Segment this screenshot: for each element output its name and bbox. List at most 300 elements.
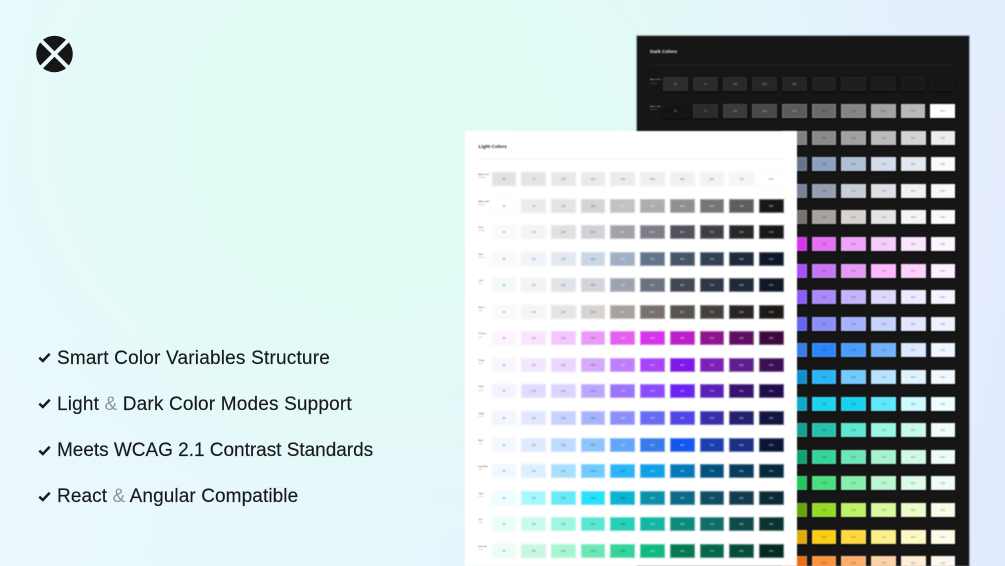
dark row: fuchsia: 600	[851, 242, 856, 246]
light row: warm: 700	[710, 310, 714, 314]
light row: violet: 200	[561, 389, 566, 393]
light row: purple: 400	[620, 363, 625, 367]
dark row: slate: 800	[911, 162, 916, 166]
dark row: green	[792, 475, 956, 491]
light row: violet: 100	[531, 389, 536, 393]
dark row: gray: 700	[881, 136, 886, 140]
light row: alpha dark: 50	[502, 177, 506, 181]
light row: indigo: 400	[620, 416, 625, 420]
light row: alpha light: 100	[561, 204, 566, 208]
light row: cyan	[478, 490, 785, 506]
dark row: sky: 400	[792, 375, 797, 379]
dark row: violet: 800	[911, 295, 916, 299]
dark row: purple: 800	[911, 268, 916, 272]
light row: alpha light: 75	[532, 204, 535, 208]
dark row: indigo: 800	[911, 322, 916, 326]
dark row: sky: 800	[911, 375, 916, 379]
dark row: lime: 700	[881, 508, 886, 512]
dark row: purple	[792, 263, 956, 279]
light row: alpha dark: 600	[710, 177, 714, 181]
light row: indigo: 700	[710, 416, 714, 420]
light row: blue: 500	[650, 442, 655, 446]
dark row: orange: 600	[851, 561, 856, 565]
light row: indigo: 800	[739, 416, 744, 420]
panel: light colors: Indigo	[478, 413, 484, 415]
light row: slate: 400	[620, 257, 625, 261]
light row: teal: 200	[561, 522, 566, 526]
dark row: blue: 700	[881, 348, 886, 352]
light row: gray: 300	[591, 230, 595, 234]
dark row: teal: 900	[941, 428, 945, 432]
panel: light colors: Variable	[478, 204, 485, 206]
dark row: slate: 700	[881, 162, 886, 166]
panel: light colors: Teal	[478, 519, 482, 521]
feature: react and angular: React & Angular Compatible	[57, 486, 298, 506]
light row: purple: 900	[769, 363, 774, 367]
dark row: purple: 400	[792, 268, 797, 272]
light row: blue: 100	[531, 442, 536, 446]
dark row: gray: 600	[851, 136, 856, 140]
panel: light colors: Color	[478, 336, 483, 338]
light row: cyan: 300	[591, 496, 595, 500]
light row: indigo: 50	[502, 416, 506, 420]
light row: alpha light	[478, 198, 785, 214]
dark row: emerald: 800	[911, 455, 916, 459]
light row: alpha light: 400	[650, 204, 655, 208]
feature: light and dark modes: Light & Dark Color Modes Support	[57, 394, 352, 414]
light row: gray: 100	[531, 230, 536, 234]
dark row: indigo: 900	[941, 322, 945, 326]
dark row: cool: 400	[792, 189, 797, 193]
panel: dark colors: Alpha Dark	[650, 79, 661, 81]
dark row: alpha dark	[650, 76, 945, 91]
dark row: violet: 500	[822, 295, 826, 299]
panel: light colors: Gray	[478, 283, 482, 285]
light row: violet: 700	[710, 389, 714, 393]
light row: warm: 200	[561, 310, 566, 314]
panel: dark colors	[637, 36, 969, 566]
panel: light colors: Light Blue	[478, 466, 488, 468]
light row: alpha dark: 500	[680, 177, 684, 181]
dark row: slate: 400	[792, 162, 797, 166]
light row: sky: 800	[739, 469, 744, 473]
dark row: yellow: 900	[941, 534, 945, 538]
panel: light colors: Neutral	[478, 230, 484, 232]
dark row: alpha light: 500	[851, 109, 856, 113]
panel: light colors: Variable	[478, 177, 485, 179]
dark row: cool	[792, 183, 956, 199]
light row: emerald: 50	[502, 549, 506, 553]
dark row: alpha dark: 400	[822, 82, 826, 86]
dark row: yellow: 400	[792, 534, 797, 538]
light row: gray: 900	[769, 230, 774, 234]
dark row: warm	[792, 209, 956, 225]
light row: cool: 600	[680, 283, 684, 287]
dark row: alpha light: 600	[881, 109, 886, 113]
light row: purple: 100	[531, 363, 536, 367]
panel: light colors: Violet	[478, 386, 484, 388]
light row: warm: 800	[739, 310, 744, 314]
dark row: fuchsia: 400	[792, 242, 797, 246]
dark row: purple: 700	[881, 268, 886, 272]
dark row: sky: 600	[851, 375, 856, 379]
dark row: emerald: 900	[941, 455, 945, 459]
dark row: indigo: 400	[792, 322, 797, 326]
dark row: alpha dark: 75	[704, 82, 707, 86]
light row: cyan: 800	[739, 496, 744, 500]
dark row: cool: 600	[851, 189, 856, 193]
dark row: lime: 400	[792, 508, 797, 512]
panel: light colors: Slate	[478, 254, 483, 256]
dark row: lime: 900	[941, 508, 945, 512]
light row: slate	[478, 251, 785, 267]
light row: fuchsia: 600	[680, 336, 684, 340]
light row: teal: 700	[710, 522, 714, 526]
light row: blue: 50	[502, 442, 506, 446]
light row: alpha light: 50	[502, 204, 506, 208]
panel: light colors: Alpha Dark	[478, 174, 489, 176]
dark row: cool: 900	[941, 189, 945, 193]
dark row: yellow: 800	[911, 534, 916, 538]
light row: emerald: 100	[531, 549, 536, 553]
light row: cyan: 500	[650, 496, 655, 500]
light row: purple: 600	[680, 363, 684, 367]
light row: violet: 900	[769, 389, 774, 393]
dark row: teal: 700	[881, 428, 886, 432]
panel: light colors: Emerald	[478, 546, 487, 548]
light row: blue: 400	[620, 442, 625, 446]
panel: light colors: Color	[478, 549, 483, 551]
panel: light colors: Cyan	[478, 493, 484, 495]
dark row: cyan: 400	[792, 402, 797, 406]
light row: cyan: 200	[561, 496, 566, 500]
dark row: gray: 900	[941, 136, 945, 140]
light row: sky: 300	[591, 469, 595, 473]
dark row: cool: 500	[822, 189, 826, 193]
light row: cyan: 400	[620, 496, 625, 500]
light row: blue: 900	[769, 442, 774, 446]
dark row: emerald: 700	[881, 455, 886, 459]
light row: slate: 50	[502, 257, 506, 261]
light row: violet: 50	[502, 389, 506, 393]
dark row: gray: 400	[792, 136, 797, 140]
light row: cyan: 100	[531, 496, 536, 500]
light row: teal: 300	[591, 522, 595, 526]
light row: blue	[478, 437, 785, 453]
light row: alpha light: 200	[591, 204, 595, 208]
light row: gray: 50	[502, 230, 506, 234]
light row: gray	[478, 224, 785, 240]
light row: alpha light: 800	[769, 204, 774, 208]
light row: cyan: 600	[680, 496, 684, 500]
light row: fuchsia: 200	[561, 336, 566, 340]
dark row: teal	[792, 422, 956, 438]
light row: warm: 300	[591, 310, 595, 314]
light row: sky: 900	[769, 469, 774, 473]
light row: sky	[478, 463, 785, 479]
logo	[36, 36, 73, 72]
light row: alpha light: 700	[739, 204, 744, 208]
dark row: orange: 500	[822, 561, 826, 565]
dark row: sky: 500	[822, 375, 826, 379]
light row: gray: 400	[620, 230, 625, 234]
dark row: alpha dark: 800	[940, 82, 945, 86]
light row: indigo: 500	[650, 416, 655, 420]
icon: check 2	[38, 398, 50, 409]
dark row: slate: 500	[822, 162, 826, 166]
dark panel title: Dark Colors	[650, 50, 677, 55]
light row: cool: 700	[710, 283, 714, 287]
light row: cool: 50	[502, 283, 506, 287]
dark row: cool: 700	[881, 189, 886, 193]
light row: cool: 500	[650, 283, 655, 287]
panel: light colors: Color	[478, 469, 483, 471]
light row: alpha light: 500	[680, 204, 684, 208]
dark row: teal: 500	[822, 428, 826, 432]
dark row: teal: 800	[911, 428, 916, 432]
dark row: cyan: 900	[941, 402, 945, 406]
dark row: fuchsia: 900	[941, 242, 945, 246]
dark row: warm: 800	[911, 215, 916, 219]
light row: teal: 500	[650, 522, 655, 526]
dark row: purple: 900	[941, 268, 945, 272]
light row: fuchsia: 50	[502, 336, 506, 340]
panel: light colors: Color	[478, 522, 483, 524]
dark row: indigo: 700	[881, 322, 886, 326]
panel: light colors	[465, 131, 797, 566]
light row: alpha dark: 700	[739, 177, 744, 181]
panel: light colors: Gray	[478, 310, 482, 312]
light row: fuchsia: 300	[591, 336, 595, 340]
light row: violet: 300	[591, 389, 595, 393]
light row: sky: 600	[680, 469, 684, 473]
light row: alpha dark: 800	[769, 177, 774, 181]
light row: cyan: 700	[710, 496, 714, 500]
light row: slate: 700	[710, 257, 714, 261]
dark row: warm: 400	[792, 215, 797, 219]
dark row: alpha dark: 50	[674, 82, 677, 86]
dark row: alpha dark: 300	[792, 82, 797, 86]
dark row: blue: 900	[941, 348, 945, 352]
dark row: sky: 700	[881, 375, 886, 379]
dark row: lime: 800	[911, 508, 916, 512]
light row: teal: 900	[769, 522, 774, 526]
dark row: cyan: 800	[911, 402, 916, 406]
dark row: green: 800	[911, 481, 916, 485]
icon: check 4	[38, 492, 50, 502]
feature: smart color variables: Smart Color Variables Structure	[57, 348, 330, 368]
dark row: orange	[782, 555, 956, 566]
dark row: blue: 800	[911, 348, 916, 352]
dark row: cyan: 700	[881, 402, 886, 406]
light row: gray: 500	[650, 230, 655, 234]
dark row: alpha light: 800	[940, 109, 945, 113]
light row: emerald: 600	[680, 549, 684, 553]
light row: purple: 700	[710, 363, 714, 367]
light row: slate: 500	[650, 257, 655, 261]
dark row: purple: 600	[851, 268, 856, 272]
dark row: violet: 400	[792, 295, 797, 299]
dark row: sky	[792, 369, 956, 385]
light row: emerald: 700	[710, 549, 714, 553]
dark row: teal: 600	[851, 428, 856, 432]
light row: cool: 400	[620, 283, 625, 287]
icon: check 3	[38, 446, 50, 456]
dark row: cyan: 500	[822, 402, 826, 406]
panel: light colors: Purple	[478, 360, 485, 362]
panel: light colors: Gray	[478, 227, 483, 229]
light row: sky: 100	[531, 469, 536, 473]
dark row: violet: 600	[851, 295, 856, 299]
light row: alpha dark: 100	[561, 177, 566, 181]
light row: emerald: 400	[620, 549, 625, 553]
light row: fuchsia: 800	[739, 336, 744, 340]
dark row: alpha light: 300	[792, 109, 797, 113]
light row: blue: 800	[739, 442, 744, 446]
light row: teal: 400	[620, 522, 625, 526]
light row: alpha dark: 400	[650, 177, 655, 181]
light row: gray: 600	[680, 230, 684, 234]
dark row: warm: 500	[822, 215, 826, 219]
dark row: lime: 600	[851, 508, 856, 512]
light row: blue: 600	[680, 442, 684, 446]
dark row: fuchsia: 800	[911, 242, 916, 246]
light row: fuchsia: 900	[769, 336, 774, 340]
dark row: gray: 500	[822, 136, 826, 140]
light row: indigo: 300	[591, 416, 595, 420]
dark row: yellow	[792, 529, 956, 545]
light row: indigo	[478, 410, 785, 426]
panel: light colors: Color	[478, 496, 483, 498]
dark row: slate: 900	[941, 162, 945, 166]
dark row: yellow: 600	[851, 534, 856, 538]
dark row: alpha dark: 100	[733, 82, 737, 86]
dark row: alpha light: 75	[704, 109, 707, 113]
light row: teal	[478, 516, 785, 532]
dark row: alpha light: 700	[911, 109, 915, 113]
feature: WCAG contrast: Meets WCAG 2.1 Contrast Standards	[57, 440, 373, 460]
light row: purple	[478, 357, 785, 373]
light row: warm	[478, 304, 785, 320]
light row: alpha dark: 200	[591, 177, 595, 181]
panel: light colors: Color	[478, 363, 483, 365]
dark row: violet: 700	[881, 295, 886, 299]
dark row: lime: 500	[822, 508, 826, 512]
panel: light colors: Blue	[478, 440, 483, 442]
light row: teal: 600	[680, 522, 684, 526]
dark row: blue: 600	[851, 348, 856, 352]
dark row: alpha dark: 500	[851, 82, 856, 86]
light row: gray: 200	[561, 230, 566, 234]
dark row: cool: 800	[911, 189, 916, 193]
light row: blue: 300	[591, 442, 595, 446]
light row: gray: 700	[710, 230, 714, 234]
dark row: orange: 800	[911, 561, 916, 565]
light row: slate: 900	[769, 257, 774, 261]
dark row: alpha light	[650, 103, 956, 119]
light row: cool: 100	[531, 283, 536, 287]
dark row: indigo: 500	[822, 322, 826, 326]
panel: dark colors: Alpha Light	[650, 106, 661, 108]
dark row: alpha light: 100	[733, 109, 737, 113]
light row: violet: 600	[680, 389, 684, 393]
light row: sky: 400	[620, 469, 625, 473]
dark row: slate: 600	[851, 162, 856, 166]
light row: emerald: 500	[650, 549, 655, 553]
light row: violet	[478, 383, 785, 399]
dark row: alpha light: 400	[822, 109, 826, 113]
light row: cool	[478, 277, 785, 293]
panel: light colors: Neutral	[478, 257, 484, 259]
dark row: slate	[792, 156, 956, 172]
light row: alpha light: 600	[710, 204, 714, 208]
dark row: green: 600	[851, 481, 856, 485]
light row: slate: 100	[531, 257, 536, 261]
light row: purple: 300	[591, 363, 595, 367]
dark row: orange: 900	[941, 561, 945, 565]
light row: sky: 500	[650, 469, 655, 473]
light row: warm: 900	[769, 310, 774, 314]
light row: emerald: 200	[561, 549, 566, 553]
light row: purple: 200	[561, 363, 566, 367]
light row: alpha dark: 300	[620, 177, 625, 181]
light row: blue: 200	[561, 442, 566, 446]
dark row: gray	[782, 130, 956, 146]
light row: indigo: 100	[531, 416, 536, 420]
light row: fuchsia: 400	[620, 336, 625, 340]
light row: gray: 800	[739, 230, 744, 234]
light row: purple: 500	[650, 363, 655, 367]
light row: sky: 200	[561, 469, 566, 473]
dark row: green: 400	[792, 481, 797, 485]
dark row: orange: 700	[881, 561, 886, 565]
light row: violet: 800	[739, 389, 744, 393]
dark row: blue	[792, 342, 956, 358]
dark row: violet: 900	[941, 295, 945, 299]
dark row: warm: 600	[851, 215, 856, 219]
light row: warm: 100	[531, 310, 536, 314]
dark row: purple: 500	[822, 268, 826, 272]
light row: teal: 100	[531, 522, 536, 526]
light row: alpha light: 300	[620, 204, 625, 208]
light row: warm: 600	[680, 310, 684, 314]
light row: purple: 50	[502, 363, 506, 367]
dark row: indigo	[792, 316, 956, 332]
dark row: lime	[792, 502, 956, 518]
dark row: yellow: 500	[822, 534, 826, 538]
light row: slate: 600	[680, 257, 684, 261]
light row: sky: 50	[502, 469, 506, 473]
dark row: emerald	[792, 449, 956, 465]
dark row: green: 500	[822, 481, 826, 485]
light row: alpha dark	[478, 172, 774, 186]
light row: emerald: 800	[739, 549, 744, 553]
dark row: emerald: 500	[822, 455, 826, 459]
dark row: violet	[792, 289, 956, 305]
panel: light colors: Color	[478, 443, 483, 445]
dark row: alpha light: 200	[762, 109, 767, 113]
dark row: blue: 400	[792, 348, 797, 352]
light row: fuchsia	[478, 330, 785, 346]
light row: warm: 500	[650, 310, 655, 314]
light row: cool: 900	[769, 283, 774, 287]
light row: alpha dark: 75	[532, 177, 535, 181]
light row: indigo: 900	[769, 416, 774, 420]
dark row: gray: 800	[911, 136, 916, 140]
light row: cyan: 900	[769, 496, 774, 500]
light row: slate: 800	[739, 257, 744, 261]
dark row: teal: 400	[792, 428, 797, 432]
